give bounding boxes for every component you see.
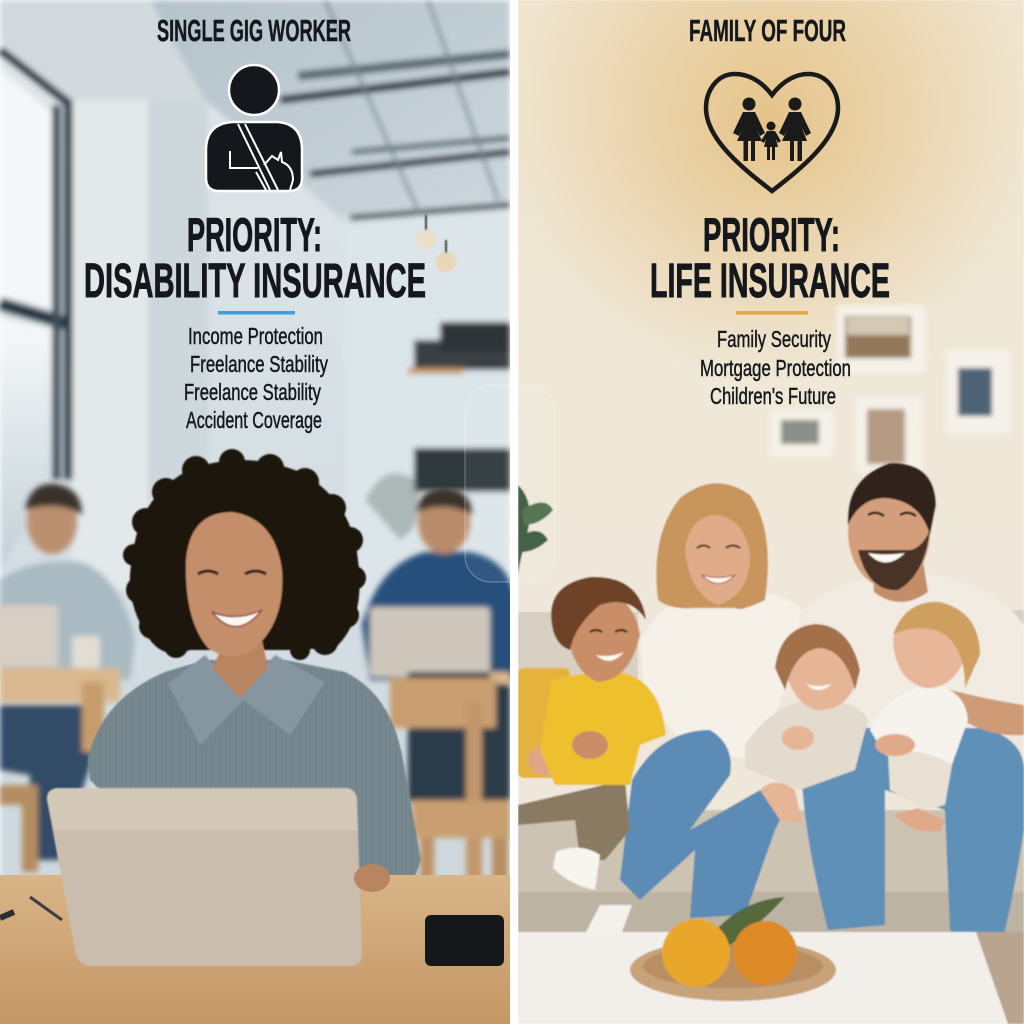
accent bar amber: [736, 311, 808, 314]
list: disability benefits: Income Protection: [188, 323, 323, 349]
fruit bowl: [630, 897, 836, 1001]
list: disability benefits: [184, 323, 328, 433]
heading: priority life insurance: [650, 208, 890, 308]
mother's hand on child: [527, 744, 552, 777]
accent bar blue: [218, 311, 295, 314]
divider ghost outline: [465, 385, 555, 582]
floor: [970, 932, 1024, 1024]
office background: [0, 0, 510, 900]
subtitle: single gig worker: SINGLE GIG WORKER: [157, 13, 351, 48]
father: [800, 463, 1024, 980]
pen: [30, 897, 62, 920]
panel: single gig worker photo scene: [0, 0, 515, 1024]
neck: [212, 640, 268, 698]
list: disability benefits: Accident Coverage: [186, 407, 322, 433]
icon: person with arm in sling: [206, 65, 302, 191]
shirt: [88, 655, 421, 896]
child in yellow shirt: [518, 577, 666, 890]
smile: [212, 610, 262, 627]
icon: family inside heart: [706, 74, 838, 191]
warm wall: [518, 0, 1024, 810]
panel: family of four photo scene: [518, 0, 1024, 1024]
framed photos on wall: [770, 305, 1011, 472]
list: life insurance benefits: Mortgage Protection: [700, 355, 851, 381]
background coworker right: [362, 488, 515, 895]
pendant lamps: [416, 215, 456, 272]
list: disability benefits: Freelance Stability: [184, 379, 321, 405]
face: [186, 512, 282, 656]
list: disability benefits: Freelance Stability: [190, 351, 328, 377]
mother: [586, 483, 802, 932]
curly hair mass: [123, 449, 366, 660]
sofa: [518, 610, 1024, 934]
heading: priority life insurance: PRIORITY:: [703, 208, 840, 261]
woman with curly hair: [88, 449, 421, 896]
table: [0, 875, 510, 1024]
coffee table: [518, 932, 1008, 1024]
subtitle: family of four: FAMILY OF FOUR: [689, 13, 846, 48]
laptop: [47, 788, 362, 966]
list: life insurance benefits: Children's Future: [710, 383, 836, 409]
toddler in cream sweater: [745, 624, 868, 822]
houseplant: [518, 485, 553, 575]
eyes: [198, 571, 266, 574]
heading: priority disability insurance: [84, 208, 426, 308]
smartphone: [425, 915, 504, 966]
background coworker left: [0, 484, 135, 872]
heading: priority disability insurance: PRIORITY:: [187, 208, 322, 261]
list: life insurance benefits: Family Security: [717, 326, 831, 352]
toddler in white shirt: [870, 602, 980, 832]
heading: priority disability insurance: DISABILITY INSURANCE: [84, 255, 426, 308]
list: life insurance benefits: [700, 326, 851, 409]
hand: [354, 864, 390, 892]
